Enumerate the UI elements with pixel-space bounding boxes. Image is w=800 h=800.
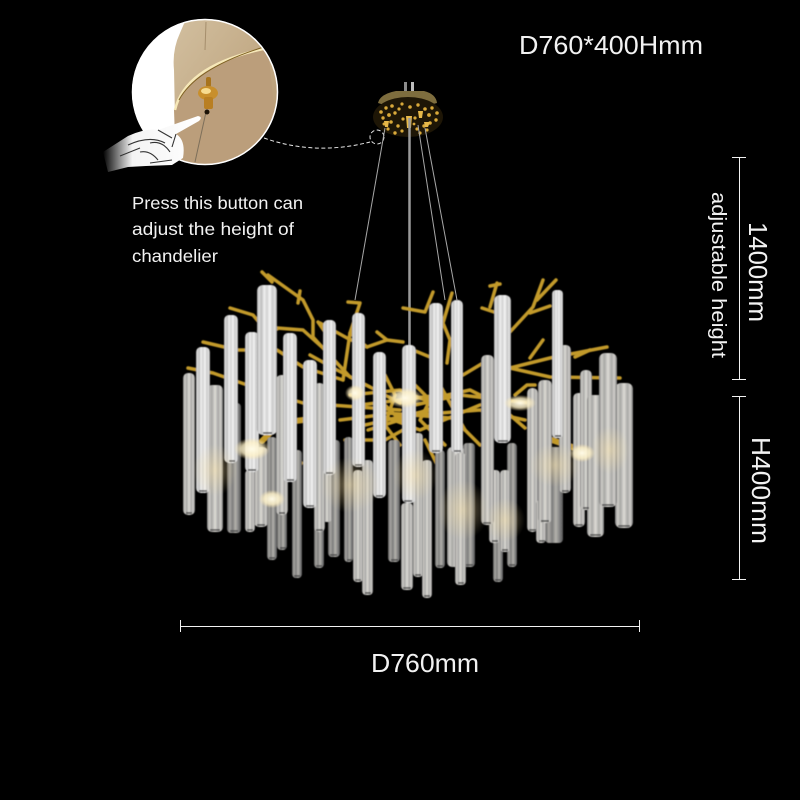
dimension: diameter bracket bbox=[180, 620, 640, 632]
warm light through tubes bbox=[193, 426, 630, 542]
text block: button instructions bbox=[132, 193, 303, 266]
label: H400mm: H400mm bbox=[746, 437, 776, 544]
canopy speckles bbox=[379, 102, 439, 135]
dimension: adjustable height bracket bbox=[732, 158, 746, 380]
chandelier bbox=[183, 272, 633, 598]
front glass tubes bbox=[196, 285, 563, 508]
infographic canvas bbox=[104, 18, 770, 672]
label: 1400mm: 1400mm bbox=[743, 222, 773, 322]
heading: overall dimensions: D760*400Hmm bbox=[519, 30, 703, 60]
bulb stems bbox=[262, 416, 578, 484]
gold branches bbox=[188, 272, 620, 500]
callout: dashed leader to button bbox=[264, 130, 384, 148]
tube tips bbox=[186, 433, 630, 596]
rear glass tubes bbox=[227, 403, 563, 582]
suspension wires bbox=[355, 118, 457, 346]
text block: button instructions: chandelier bbox=[132, 246, 218, 266]
icon: gold button bbox=[198, 77, 218, 114]
ceiling canopy bbox=[373, 82, 443, 137]
icon: pointing hand bbox=[103, 116, 201, 172]
text block: button instructions: Press this button can bbox=[132, 193, 303, 213]
label: D760mm: D760mm bbox=[371, 648, 479, 678]
label: adjustable height: adjustable height bbox=[707, 192, 729, 358]
central branch cluster bbox=[340, 375, 560, 445]
glowing bulbs bbox=[234, 385, 595, 508]
dimension: fixture height bracket bbox=[732, 396, 746, 580]
inset: detail of height adjustment button bbox=[103, 19, 280, 172]
text block: button instructions: adjust the height of bbox=[132, 219, 294, 239]
middle glass tubes bbox=[183, 345, 633, 598]
